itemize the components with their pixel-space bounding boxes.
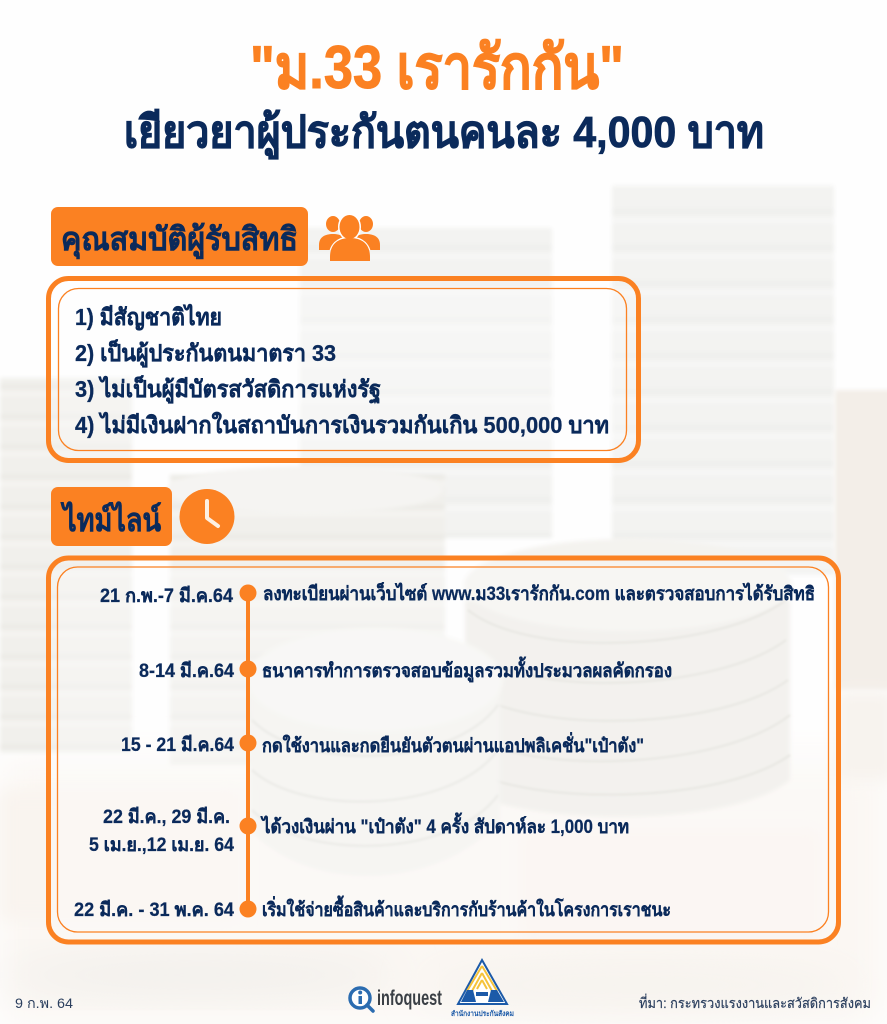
panel: eligibility criteria <box>48 278 638 460</box>
criterion 4: 4) ไม่มีเงินฝากในสถาบันการเงินรวมกันเกิน 500,000 บาท <box>75 411 609 438</box>
front coin stack, centre <box>250 690 500 876</box>
heading: eligibility: คุณสมบัติผู้รับสิทธิ <box>61 221 298 260</box>
timeline row 1: 21 ก.พ.-7 มี.ค.64 <box>100 585 233 607</box>
timeline row 4: 5 เม.ย.,12 เม.ย. 64 <box>89 835 234 856</box>
timeline row 2: 8-14 มี.ค.64 <box>139 660 234 682</box>
title line 2: เยียวยาผู้ประกันตนคนละ 4,000 บาท <box>124 108 764 159</box>
criterion 2: 2) เป็นผู้ประกันตนมาตรา 33 <box>75 338 336 368</box>
timeline row 3 <box>121 732 644 757</box>
source credit: ที่มา: กระทรวงแรงงานและสวัสดิการสังคม <box>639 994 871 1011</box>
timeline row 1 <box>100 581 815 607</box>
timeline row 2: ธนาคารทำการตรวจสอบข้อมูลรวมทั้งประมวลผลคัดกรอง <box>262 656 672 683</box>
timeline row 4 <box>89 806 629 856</box>
icon: clock <box>180 489 234 544</box>
logo: infoquest <box>350 987 442 1011</box>
criterion 3: 3) ไม่เป็นผู้มีบัตรสวัสดิการแห่งรัฐ <box>75 374 381 404</box>
date stamp: 9 ก.พ. 64 <box>15 995 73 1011</box>
heading: eligibility <box>51 207 308 266</box>
timeline row 5: 22 มี.ค. - 31 พ.ค. 64 <box>74 899 234 921</box>
heading: timeline: ไทม์ไลน์ <box>60 501 161 538</box>
timeline row 1: ลงทะเบียนผ่านเว็บไซต์ www.ม33เรารักกัน.com และตรวจสอบการได้รับสิทธิ <box>263 581 815 605</box>
logo: infoquest: infoquest <box>377 987 442 1010</box>
title <box>124 34 764 159</box>
timeline row 4: ได้วงเงินผ่าน "เป๋าตัง" 4 ครั้ง สัปดาห์ละ 1,000 บาท <box>260 812 629 838</box>
timeline row 2 <box>139 656 672 683</box>
criterion 1: 1) มีสัญชาติไทย <box>75 303 222 331</box>
panel: timeline <box>48 558 838 942</box>
heading: timeline <box>51 487 172 546</box>
timeline axis <box>240 584 256 918</box>
logo: social security office <box>451 960 514 1018</box>
logo: social security office: สำนักงานประกันสังคม <box>451 1009 514 1018</box>
timeline row 3: กดใช้งานและกดยืนยันตัวตนผ่านแอปพลิเคชั่น"เป๋าตัง" <box>262 732 644 757</box>
timeline row 3: 15 - 21 มี.ค.64 <box>121 734 234 756</box>
timeline row 5 <box>74 895 671 921</box>
large coin stack, right <box>465 600 790 817</box>
title line 1: "ม.33 เรารักกัน" <box>250 34 624 101</box>
timeline row 5: เริ่มใช้จ่ายซื้อสินค้าและบริการกับร้านค้าในโครงการเราชนะ <box>262 895 671 921</box>
timeline row 4: 22 มี.ค., 29 มี.ค. <box>103 806 230 828</box>
icon: people <box>319 215 380 261</box>
